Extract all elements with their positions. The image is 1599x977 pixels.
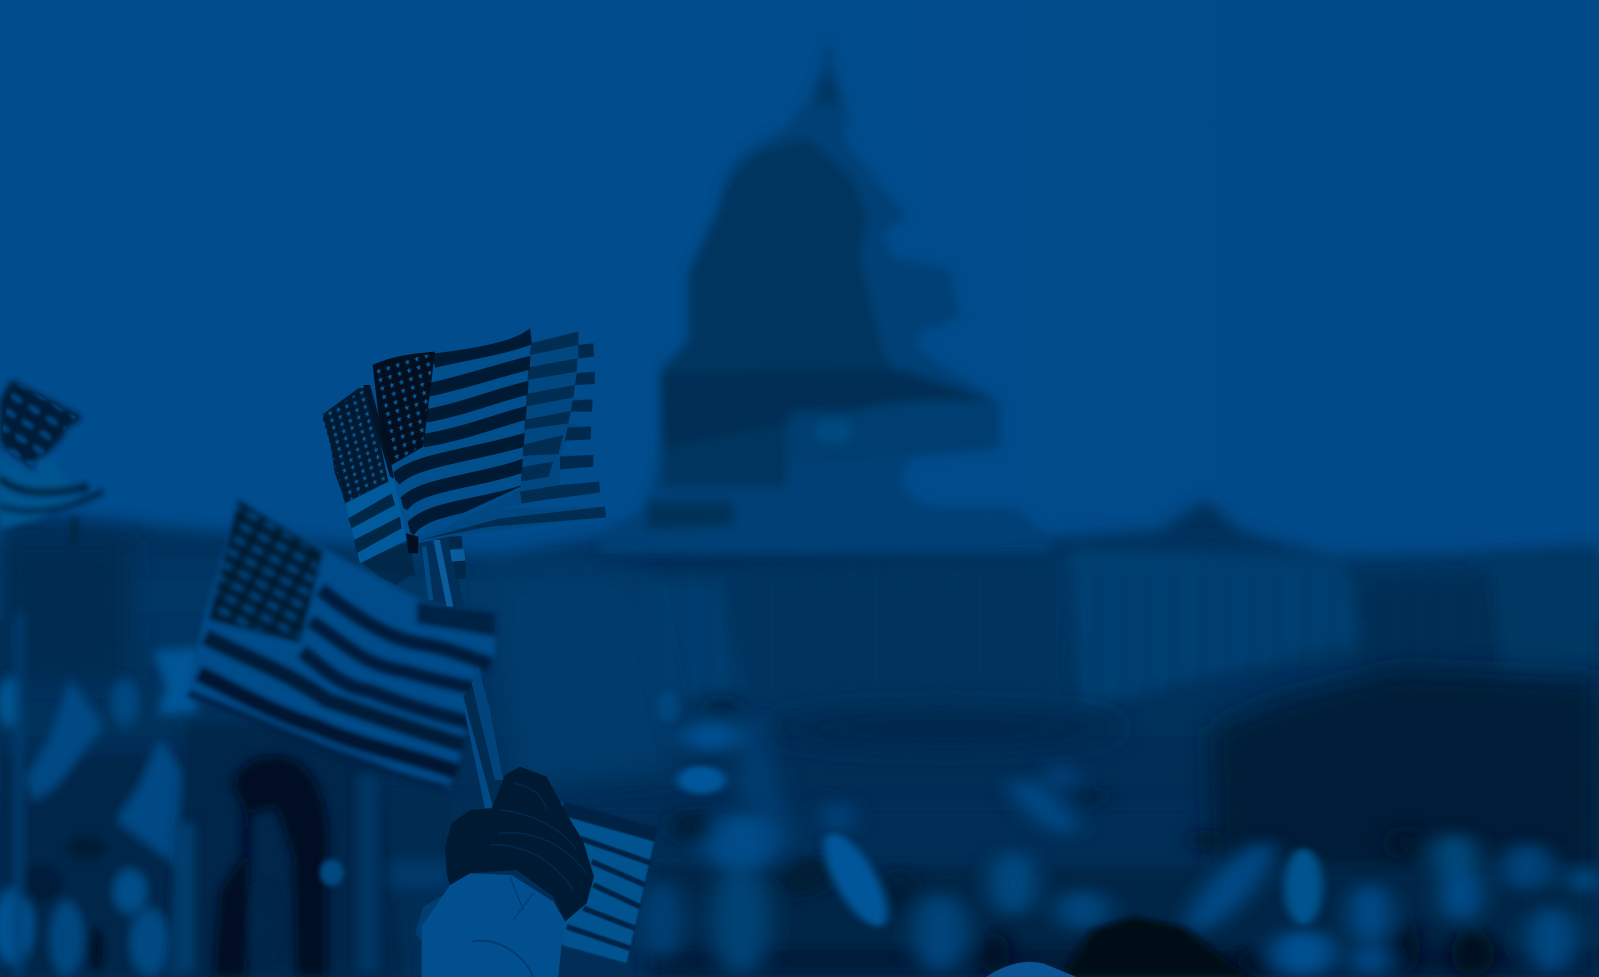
- flag sticks: [418, 537, 503, 808]
- Capitol lower building: [570, 550, 1599, 720]
- crowd: left side: [0, 612, 207, 977]
- large blurred flag: [187, 493, 495, 790]
- dark tree mass right: [1210, 670, 1599, 880]
- mid-tone ground left of building: [490, 565, 680, 790]
- dark band under building: [765, 708, 1125, 748]
- held flag: translucent flying end: [420, 332, 606, 540]
- crowd figure silhouette: [170, 720, 453, 977]
- hand: dark quilted glove: [445, 767, 594, 922]
- small blurred flag at left edge: [0, 380, 103, 545]
- building columns: [590, 570, 1490, 700]
- held flag: front flag: [373, 328, 533, 553]
- ground base: [0, 620, 1599, 977]
- Capitol dome: [600, 37, 1050, 590]
- flag behind the hand: [562, 802, 657, 963]
- city skyline: [0, 500, 1599, 800]
- crowd: right side and bottom: [642, 690, 1598, 977]
- small tail stripes below held flags: [360, 536, 467, 585]
- hand: puffer sleeve: [415, 767, 594, 977]
- held flag: back flag: [322, 385, 417, 577]
